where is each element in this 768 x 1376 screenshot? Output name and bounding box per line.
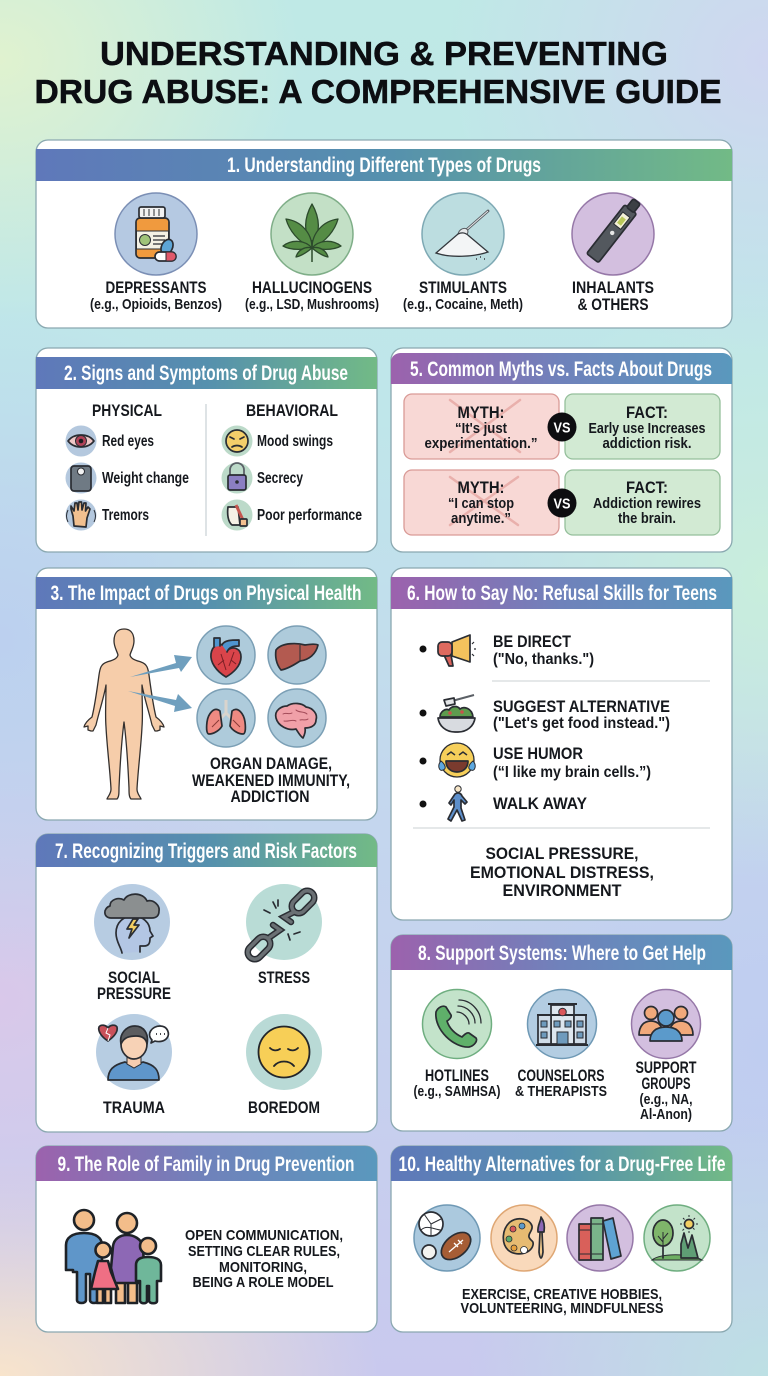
label: counselors: & THERAPISTS [515,1083,607,1100]
column heading: physical: PHYSICAL [92,402,162,420]
icon: liver [268,626,326,684]
summary: pressures: SOCIAL PRESSURE, [486,844,638,863]
human body figure [84,629,164,799]
icon: heart [197,626,255,684]
icon: bored face [246,1014,322,1090]
label: health effects [192,755,350,806]
icon: hotline phone [422,990,492,1058]
icon: cannabis leaf [271,193,353,275]
panel: role of family [36,1146,377,1332]
panel: types of drugs [36,140,732,328]
label: depressants: DEPRESSANTS [106,279,206,297]
vs badge 1: VS [554,420,570,436]
skill: walk away [420,786,588,821]
myth card 1 [404,394,559,459]
myth card 2 [404,470,559,535]
label: hallucinogens: (e.g., LSD, Mushrooms) [245,296,379,313]
myth card 2: anytime.” [451,510,511,527]
text: family roles: OPEN COMMUNICATION, [185,1227,343,1244]
vs badge 2: VS [554,496,570,512]
label: stimulants [403,279,523,313]
skill: use humor [420,743,651,781]
label: hallucinogens [245,279,379,313]
heading: section 3: 3. The Impact of Drugs on Physical Health [50,581,362,605]
icon: pill bottle [115,193,197,275]
label: health effects: WEAKENED IMMUNITY, [192,772,350,790]
label: hotlines: HOTLINES [425,1067,489,1085]
icon: sports balls [414,1205,480,1271]
panel: refusal skills [391,568,732,920]
icon: art palette [491,1205,557,1271]
text: family roles: BEING A ROLE MODEL [192,1274,334,1291]
myth card 1: “It's just [455,420,507,437]
text: family roles: SETTING CLEAR RULES, [188,1243,340,1260]
label: counselors [515,1067,607,1100]
label: health effects: ORGAN DAMAGE, [210,755,332,773]
label: support groups [636,1059,696,1123]
label: social pressure: PRESSURE [97,985,171,1003]
icon: weight scale [66,462,96,494]
label: depressants: (e.g., Opioids, Benzos) [90,296,222,313]
panel: triggers and risk factors [36,834,377,1132]
panel: myths vs facts [391,348,732,552]
icon: nature scene [644,1205,710,1271]
fact card 2: Addiction rewires [593,495,701,512]
icon: vape pen [572,193,654,275]
heading: section 2 [36,357,377,389]
arrow: body to heart [130,655,192,677]
label: support groups: SUPPORT [636,1059,696,1077]
heading: section 7: 7. Recognizing Triggers and Risk Factors [55,839,357,863]
skill: suggest alternative: ("Let's get food instead.") [493,715,670,732]
fact card 1: Early use Increases [588,420,706,437]
myth card 1: MYTH: [458,404,504,422]
text: healthy activities: VOLUNTEERING, MINDFULNESS [460,1300,664,1317]
label: hotlines [414,1067,501,1100]
fact card 1: FACT: [626,404,668,422]
myth card 2: “I can stop [448,495,514,512]
icon: clinic building [528,990,596,1058]
fact card 1: addiction risk. [602,435,692,452]
text: healthy activities [460,1286,664,1317]
skill: be direct [420,632,594,668]
label: hotlines: (e.g., SAMHSA) [414,1083,501,1100]
arrow: body to lungs [128,691,192,712]
sign: mood swings: Mood swings [257,433,333,450]
panel: signs and symptoms [36,348,377,552]
heading: section 9 [36,1146,377,1181]
icon: poor performance [222,500,252,530]
label: support groups: Al-Anon) [640,1106,692,1123]
heading: section 7 [36,834,377,867]
summary: pressures: ENVIRONMENT [502,881,622,900]
text: family roles: MONITORING, [219,1259,307,1276]
myth card 2: MYTH: [458,479,504,497]
icon: powder and spoon [422,193,504,275]
label: stimulants: (e.g., Cocaine, Meth) [403,296,523,313]
skill: suggest alternative: SUGGEST ALTERNATIVE [493,697,670,716]
heading: section 2: 2. Signs and Symptoms of Drug Abuse [64,361,348,385]
label: support groups: GROUPS [642,1075,690,1093]
label: trauma: TRAUMA [103,1099,165,1117]
icon: lungs [197,689,255,747]
summary: pressures: EMOTIONAL DISTRESS, [470,863,654,882]
icon: brain [268,689,326,747]
label: social pressure [97,969,171,1003]
skill: walk away: WALK AWAY [493,794,588,813]
label: inhalants: & OTHERS [578,296,648,314]
icon: padlock [222,462,252,494]
title [34,36,722,111]
title: UNDERSTANDING & PREVENTING [100,36,668,73]
label: hallucinogens: HALLUCINOGENS [252,279,372,297]
fact card 2 [565,470,720,535]
heading: section 5 [391,353,732,384]
label: social pressure: SOCIAL [108,969,160,987]
label: depressants [90,279,222,313]
label: inhalants: INHALANTS [572,279,654,297]
panel: healthy alternatives [391,1146,732,1332]
skill: use humor: (“I like my brain cells.”) [493,764,651,781]
skill: be direct: ("No, thanks.") [493,651,594,668]
label: support groups: (e.g., NA, [640,1091,692,1108]
label: stress: STRESS [258,969,310,987]
title: DRUG ABUSE: A COMPREHENSIVE GUIDE [34,74,722,111]
icon: family [66,1210,161,1303]
sign: secrecy: Secrecy [257,470,303,487]
heading: section 1 [36,149,732,181]
icon: trauma person [96,1014,172,1090]
fact card 2: FACT: [626,479,668,497]
text: healthy activities: EXERCISE, CREATIVE HOBBIES, [462,1286,662,1303]
icon: support group [632,990,700,1058]
sign: tremors: Tremors [102,507,149,524]
icon: trembling hand [66,500,96,530]
fact card 1 [565,394,720,459]
panel: support systems [391,935,732,1131]
summary: pressures [470,844,654,900]
heading: section 9: 9. The Role of Family in Drug Prevention [58,1152,354,1176]
heading: section 3 [36,577,377,609]
label: health effects: ADDICTION [230,788,310,806]
icon: moody face [222,426,252,456]
skill: suggest alternative [420,695,670,732]
sign: red eyes: Red eyes [102,433,154,450]
sign: poor performance: Poor performance [257,507,362,524]
vs badge 2 [548,488,576,518]
sign: weight change: Weight change [102,470,189,487]
panel: physical health impact [36,568,377,820]
label: boredom: BOREDOM [248,1099,320,1117]
skill: use humor: USE HUMOR [493,744,583,763]
icon: books [567,1205,633,1271]
heading: section 1: 1. Understanding Different Types of Drugs [227,153,541,177]
heading: section 6 [391,577,732,609]
fact card 2: the brain. [618,510,676,527]
label: inhalants [572,279,654,314]
heading: section 10 [391,1146,732,1181]
icon: storm cloud over head [94,884,170,960]
heading: section 8 [391,935,732,970]
vs badge 1 [548,412,576,442]
label: stimulants: STIMULANTS [419,279,507,297]
skill: be direct: BE DIRECT [493,632,572,651]
myth card 1: experimentation.” [424,435,538,452]
text: family roles [185,1227,343,1291]
icon: broken chain [245,884,322,962]
icon: red eye [66,426,96,456]
label: counselors: COUNSELORS [518,1067,604,1085]
column heading: behavioral: BEHAVIORAL [246,402,338,420]
